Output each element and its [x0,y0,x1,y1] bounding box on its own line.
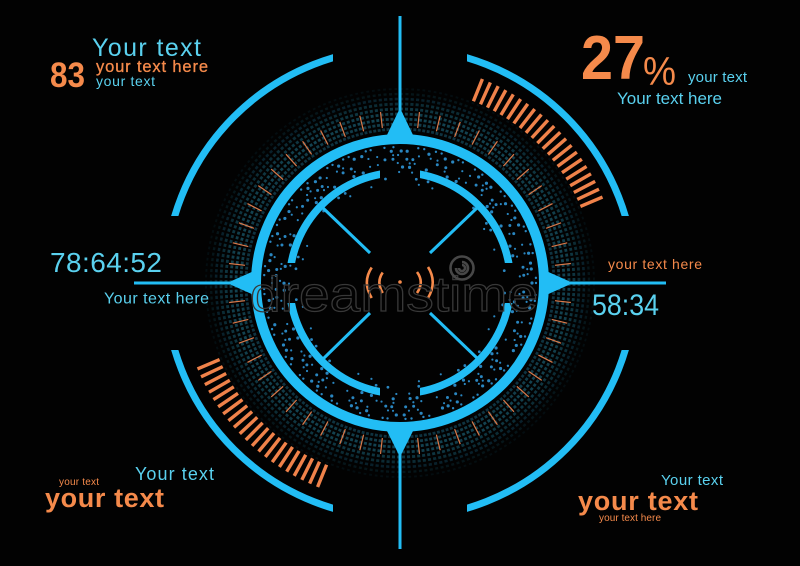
inner arcs [290,172,510,394]
text block: bottom left: your text [59,477,99,488]
text block: bottom right [578,472,724,524]
text block: top left: your text here [96,58,208,76]
text block: left timer [50,247,209,308]
center signal icon [367,267,433,298]
outer arcs [165,48,635,518]
blue speckle field [264,147,536,419]
text block: top right 27%: Your text here [617,89,722,108]
text block: top left: your text [96,73,155,89]
text block: bottom left [45,464,214,513]
text block: bottom right: Your text [661,472,724,489]
text block: right timer: 58:34 [592,289,659,322]
text block: right timer [592,256,702,322]
orange tick marks [229,112,571,454]
text block: left timer: Your text here [104,290,209,308]
text block: top left: 83 [50,56,85,95]
crosshair with triangles [134,16,666,549]
text block: top left: Your text [92,34,201,62]
text block: bottom left: your text [45,483,164,513]
dotted halo ring [206,89,594,477]
text block: bottom left: Your text [135,464,214,484]
watermark: dreamstime [250,268,538,322]
text block: top right 27%: your text [688,69,748,86]
main thick ring [256,139,544,427]
text block: left timer: 78:64:52 [50,247,162,278]
text block: right timer: your text here [608,256,702,272]
text block: bottom right: your text [578,486,698,516]
diagonal lines [322,207,478,359]
text block: bottom right: your text here [599,513,661,524]
orange bar gauges [197,79,603,487]
text block: top left [50,34,208,95]
text block: top right 27%: % [643,50,676,94]
text block: top right 27%: 27 [581,24,645,93]
text block: top right 27% [581,24,748,108]
